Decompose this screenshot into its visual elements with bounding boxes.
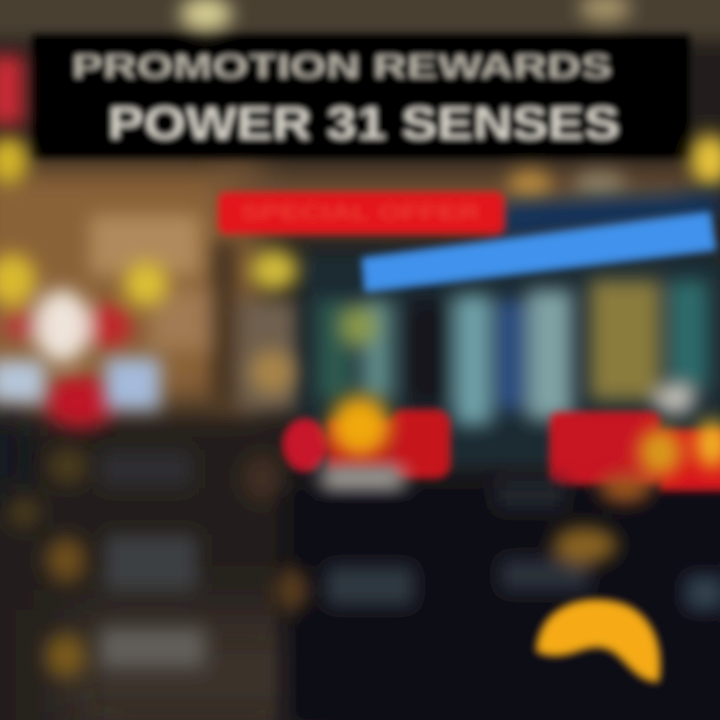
left blue counter [0, 358, 160, 410]
red banner [218, 192, 504, 234]
right machine body [283, 192, 720, 720]
left shop lights and balloons [0, 250, 298, 428]
title line 1: PROMOTION REWARDS [72, 48, 612, 86]
white strip [322, 466, 404, 490]
right lower text blocks [325, 480, 720, 611]
yellow lamps [330, 396, 720, 502]
left shop wall [90, 215, 300, 410]
red banner: SPECIAL OFFER [240, 200, 480, 225]
navy roof band [500, 192, 720, 238]
left dark area [0, 420, 20, 490]
blue roof [362, 212, 716, 292]
title banner [32, 34, 690, 158]
title line 2: POWER 31 SENSES [108, 97, 620, 149]
left red sign [0, 55, 24, 125]
pillars and windows [318, 280, 708, 425]
ceiling lights [0, 0, 720, 198]
red panels [283, 410, 720, 490]
yellow arch icon [542, 605, 655, 676]
left list icons and text [8, 448, 308, 678]
